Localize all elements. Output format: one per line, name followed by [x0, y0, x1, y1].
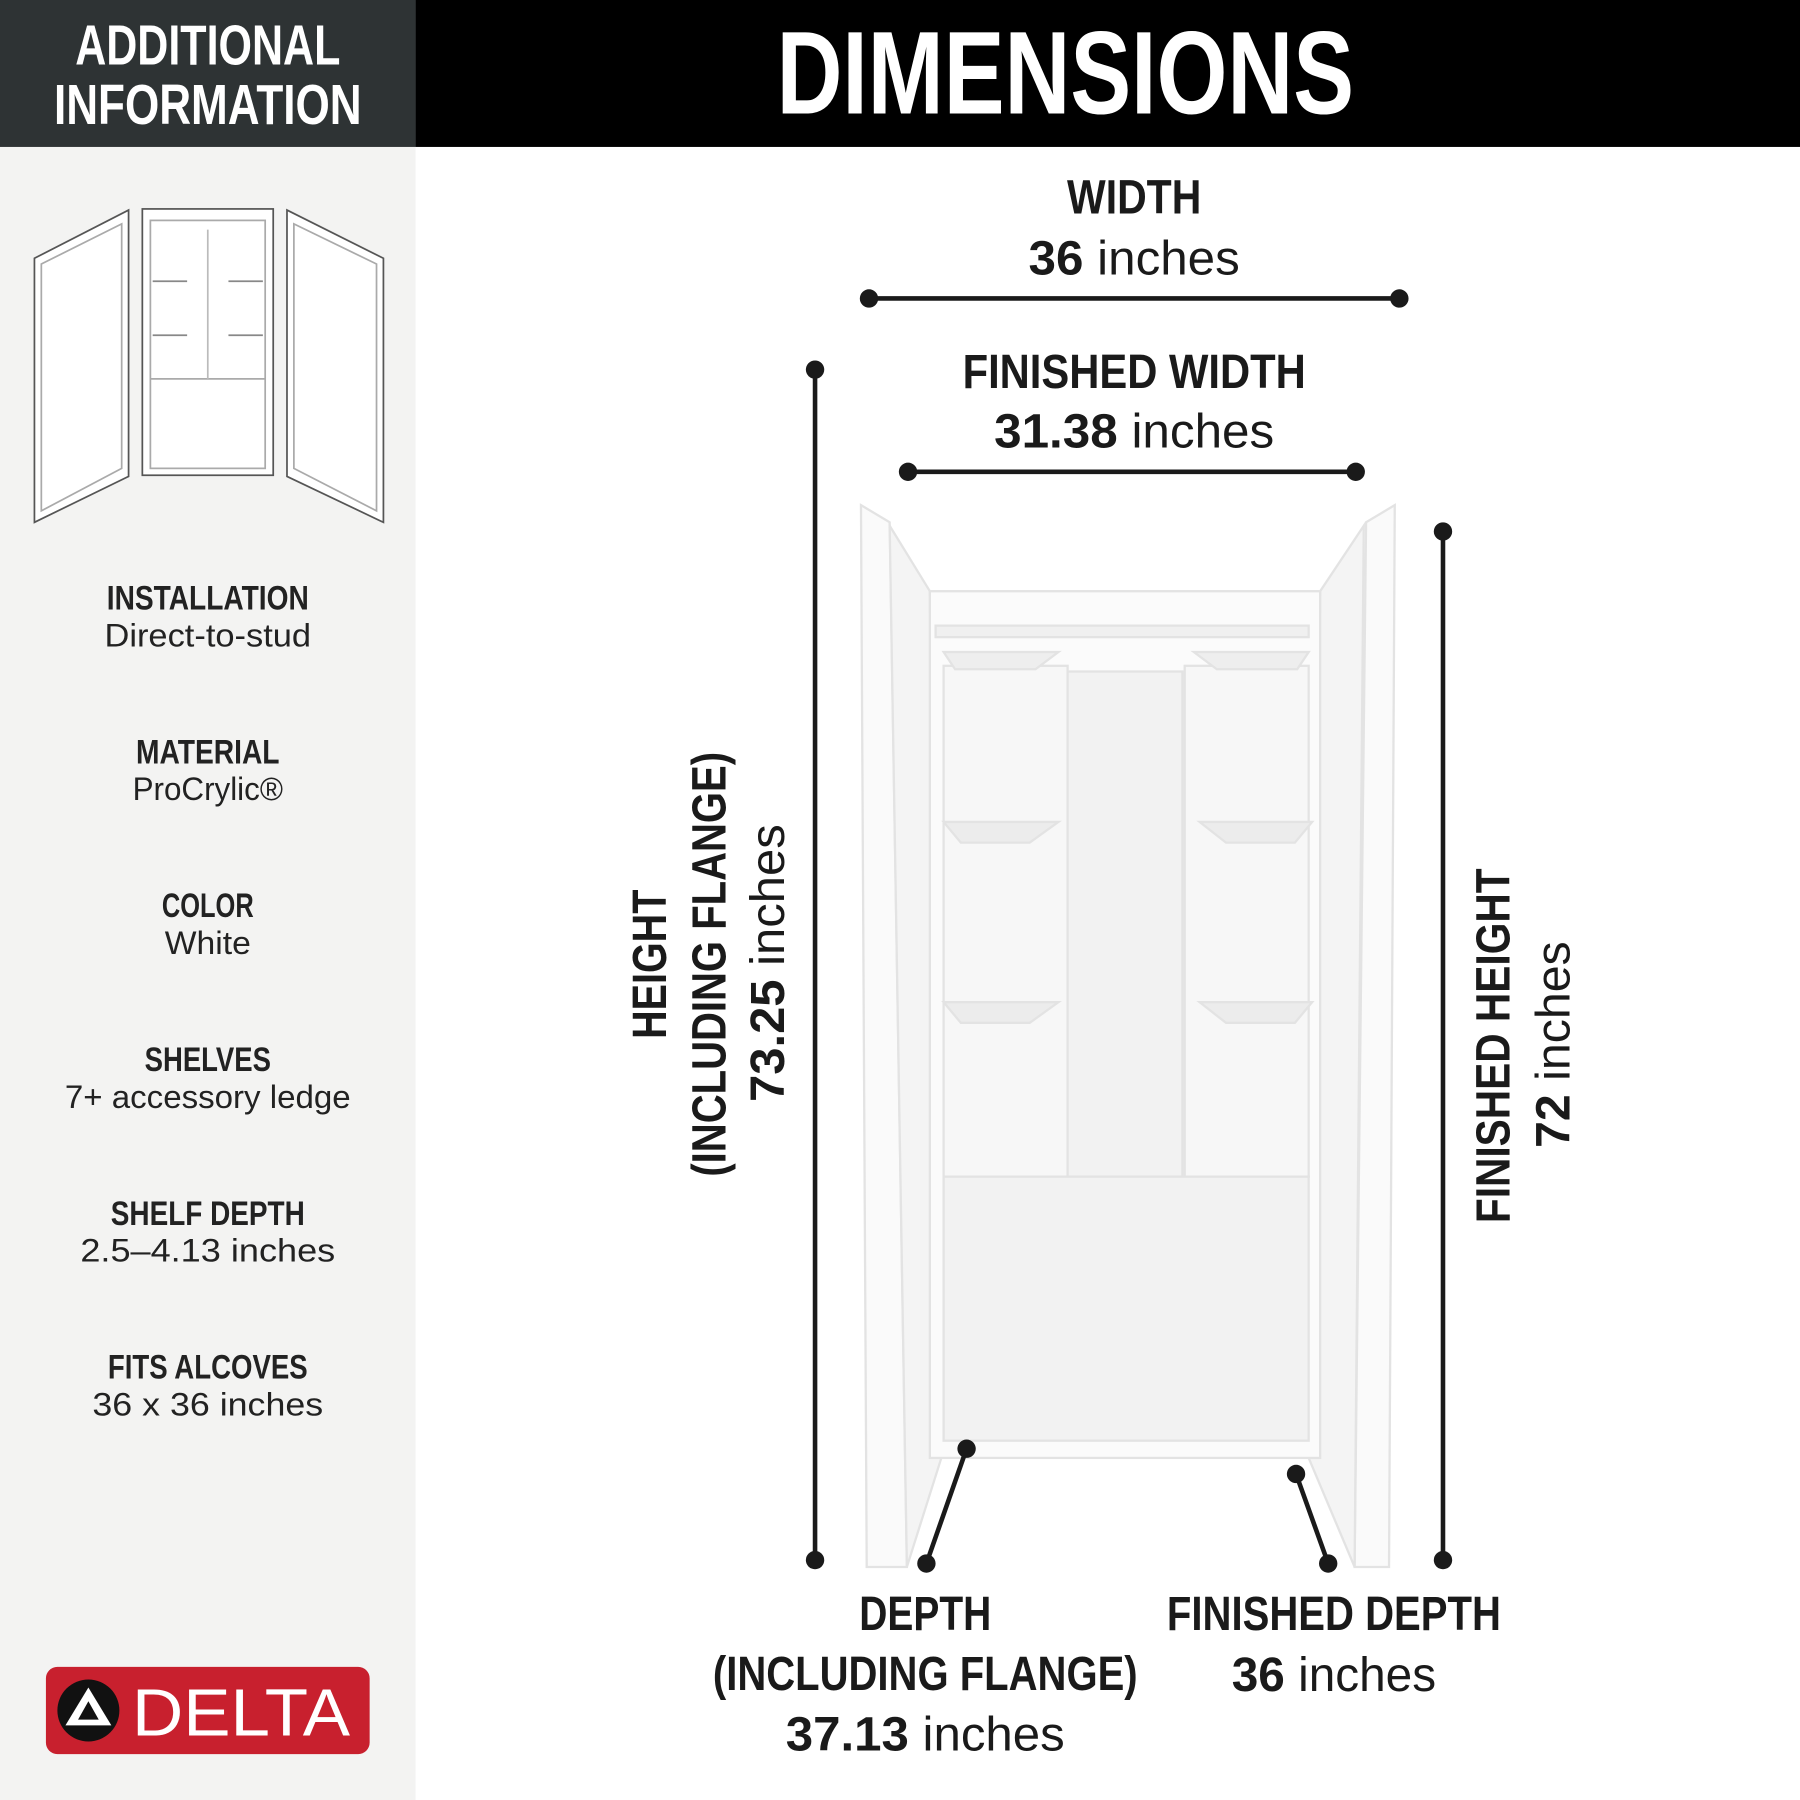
header: dimensions title: DIMENSIONS	[777, 8, 1354, 140]
dimension: height including flange: 73.25 inches	[741, 824, 795, 1102]
header: additional information: INFORMATION	[54, 73, 362, 136]
spec: fits alcoves: FITS ALCOVES	[108, 1349, 308, 1387]
dimension: finished height: 72 inches	[1526, 941, 1580, 1148]
spec: color: White	[165, 925, 251, 961]
spec: material	[133, 733, 283, 807]
dimension: finished width	[899, 345, 1365, 481]
spec: material: ProCrylic®	[133, 771, 283, 807]
panel: left sidebar background	[0, 0, 416, 1800]
dimension: height including flange: HEIGHT	[623, 890, 677, 1039]
dimension: finished depth	[1167, 1465, 1501, 1702]
spec: color: COLOR	[162, 887, 254, 925]
spec: fits alcoves: 36 x 36 inches	[92, 1386, 323, 1422]
spec: installation	[104, 580, 311, 653]
dimension: finished depth: FINISHED DEPTH	[1167, 1587, 1501, 1641]
icon: exploded shower panels thumbnail	[34, 209, 383, 522]
dimension: height including flange: (INCLUDING FLANGE)	[683, 752, 737, 1177]
dimension: depth including flange: (INCLUDING FLANGE)	[713, 1647, 1138, 1701]
dimension: width	[860, 171, 1409, 308]
logo: delta	[46, 1667, 370, 1754]
dimension: finished depth: 36 inches	[1232, 1648, 1436, 1702]
header: additional information	[0, 0, 416, 147]
spec: material: MATERIAL	[136, 733, 280, 771]
dimension: finished height: FINISHED HEIGHT	[1467, 868, 1521, 1223]
spec: shelf depth: SHELF DEPTH	[111, 1195, 305, 1233]
header: additional information: ADDITIONAL	[75, 13, 340, 76]
dimension: finished width: FINISHED WIDTH	[963, 345, 1306, 399]
spec: installation: Direct-to-stud	[104, 617, 311, 653]
dimension: width: WIDTH	[1067, 171, 1201, 225]
dimension: depth including flange: DEPTH	[859, 1587, 991, 1641]
spec: shelves: SHELVES	[145, 1041, 271, 1079]
dimension: depth including flange: 37.13 inches	[786, 1708, 1065, 1762]
spec: shelf depth: 2.5–4.13 inches	[80, 1233, 335, 1269]
header: dimensions title	[416, 0, 1800, 147]
spec: installation: INSTALLATION	[107, 580, 309, 618]
illustration: shower wall set	[861, 505, 1395, 1567]
dimension: finished width: 31.38 inches	[994, 405, 1274, 459]
dimension: finished height	[1434, 522, 1580, 1569]
spec: shelves	[65, 1041, 351, 1115]
spec: color	[162, 887, 254, 961]
dimension: height including flange	[623, 360, 824, 1569]
dimension: depth including flange	[713, 1440, 1138, 1762]
spec: fits alcoves	[92, 1349, 323, 1422]
spec: shelves: 7+ accessory ledge	[65, 1079, 351, 1115]
dimension: width: 36 inches	[1029, 231, 1240, 285]
logo: delta: DELTA	[132, 1677, 351, 1751]
spec: shelf depth	[80, 1195, 335, 1269]
